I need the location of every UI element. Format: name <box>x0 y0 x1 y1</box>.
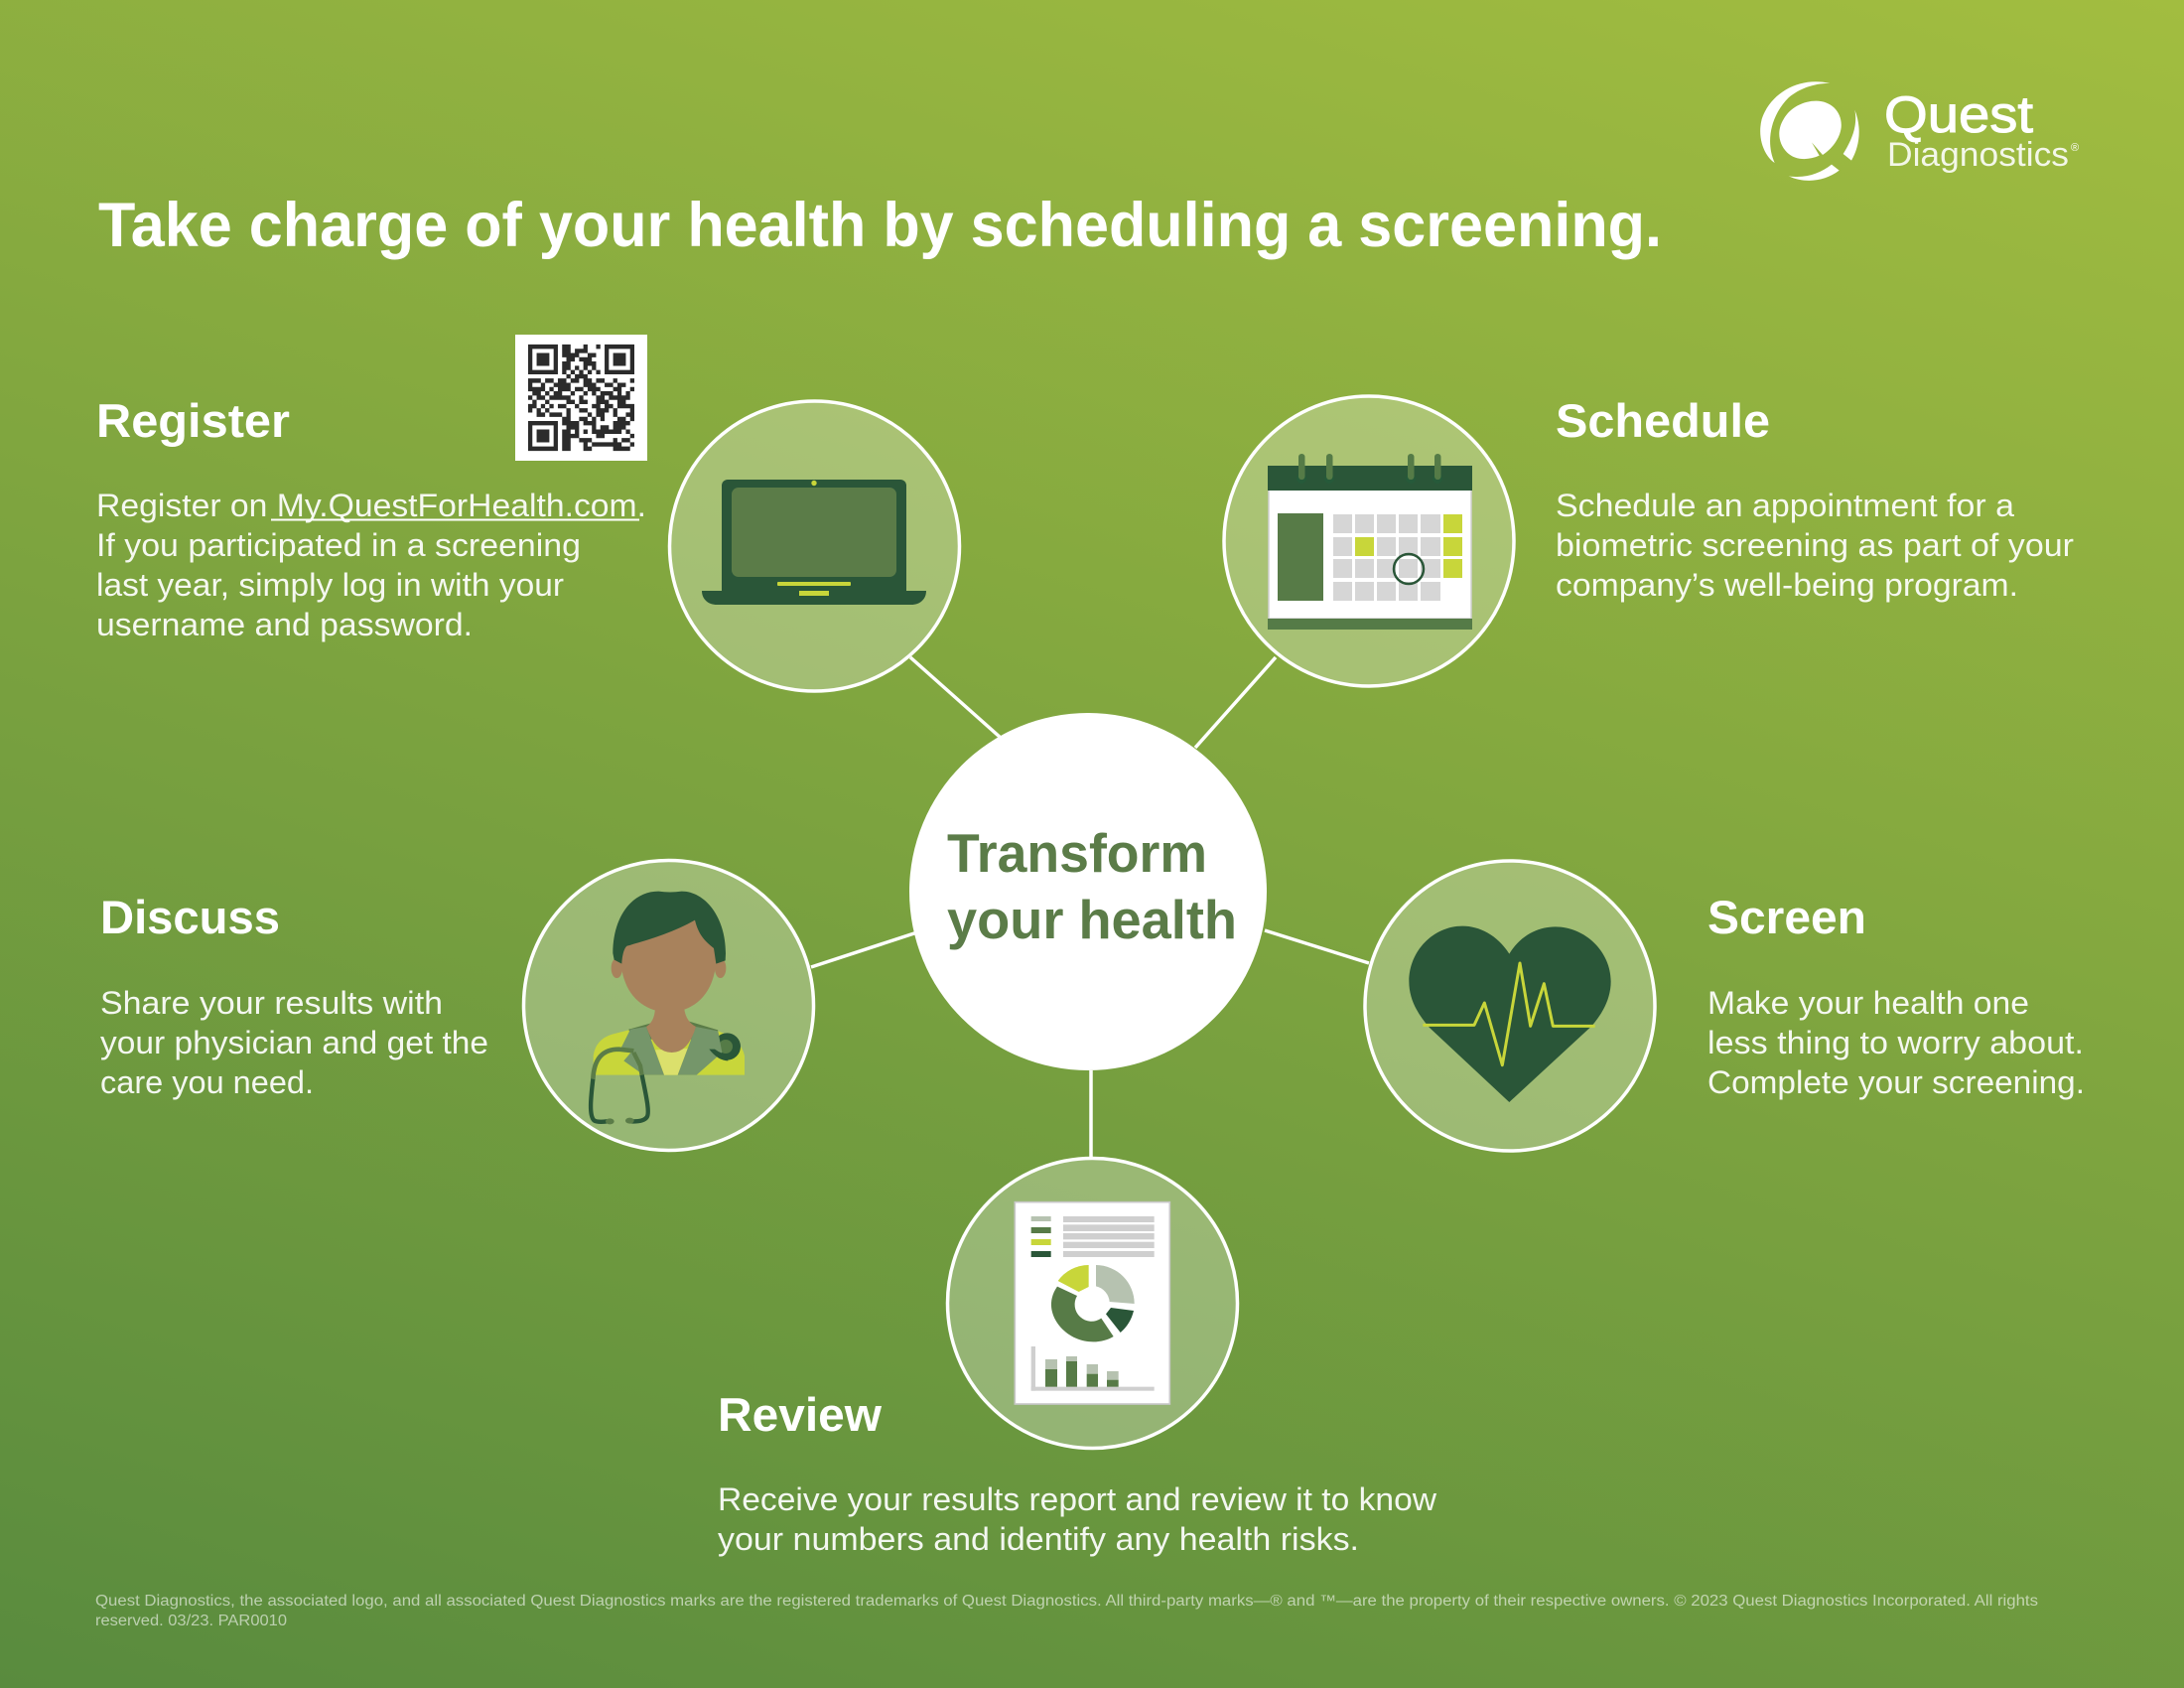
connector lines <box>811 657 1369 1157</box>
text block: Schedule description: company’s well-being program. <box>1556 567 2018 603</box>
circle: calendar <box>1224 396 1514 686</box>
text block: Schedule description <box>1556 488 2074 603</box>
panel: Register <box>96 394 646 642</box>
panel: Discuss <box>100 891 488 1100</box>
footer legal text: Quest Diagnostics, the associated logo, and all associated Quest Diagnostics marks are the registered trademarks of Quest Diagnostics. All third-party marks—® and ™—are the property of their respective owners. © 2023 Quest Diagnostics Incorporated. All rights <box>95 1593 2038 1610</box>
text block: Schedule description: biometric screening as part of your <box>1556 527 2074 563</box>
panel: Review <box>718 1388 1437 1557</box>
text block: Screen description: less thing to worry about. <box>1707 1025 2084 1060</box>
icon: Quest Q mark <box>1760 81 1859 181</box>
heading: Discuss: Discuss <box>100 891 280 943</box>
text block: Register description: username and password. <box>96 607 473 642</box>
footer legal text: reserved. 03/23. PAR0010 <box>95 1613 287 1629</box>
circle: doctor <box>524 860 814 1150</box>
text block: Review description <box>718 1481 1437 1557</box>
text block: Register description: last year, simply log in with your <box>96 567 564 603</box>
panel: Schedule <box>1556 394 2074 603</box>
text block: Screen description <box>1707 985 2085 1100</box>
text block: Discuss description <box>100 985 488 1100</box>
text block: Register description: Register on My.QuestForHealth.com. <box>96 488 646 523</box>
logo wordmark: Diagnostics <box>1887 136 2069 174</box>
heading: Schedule: Schedule <box>1556 394 1770 447</box>
icon: results report <box>1015 1202 1169 1404</box>
heading: Review: Review <box>718 1388 882 1441</box>
text block: Schedule description: Schedule an appointment for a <box>1556 488 2014 523</box>
panel: Screen <box>1707 891 2085 1100</box>
logo wordmark: ® <box>2071 142 2079 154</box>
logo: Quest Diagnostics <box>1760 81 2079 181</box>
icon: heart with pulse line <box>1409 926 1611 1102</box>
center circle: Transform your health: Transform <box>947 823 1207 884</box>
logo wordmark: Quest <box>1884 86 2034 144</box>
logo wordmark <box>1884 86 2079 174</box>
icon: laptop <box>702 480 926 605</box>
circle: report <box>947 1158 1237 1448</box>
center circle: Transform your health <box>909 713 1267 1070</box>
icon: doctor with stethoscope <box>591 892 745 1124</box>
footer legal text <box>95 1593 2038 1629</box>
text block: Review description: Receive your results report and review it to know <box>718 1481 1437 1517</box>
text block: Review description: your numbers and identify any health risks. <box>718 1521 1359 1557</box>
text block: Screen description: Make your health one <box>1707 985 2029 1021</box>
heading: Screen: Screen <box>1707 891 1866 943</box>
heading: Register: Register <box>96 394 290 447</box>
text block: Discuss description: care you need. <box>100 1064 314 1100</box>
QR code <box>515 335 647 461</box>
title: Take charge of your health by scheduling a screening. <box>98 191 1662 260</box>
text block: Discuss description: Share your results with <box>100 985 443 1021</box>
text block: Register description <box>96 488 646 642</box>
icon: calendar <box>1268 454 1472 630</box>
text block: Discuss description: your physician and get the <box>100 1025 488 1060</box>
center circle: Transform your health: your health <box>947 890 1237 950</box>
text block: Screen description: Complete your screening. <box>1707 1064 2085 1100</box>
text block: Register description: If you participated in a screening <box>96 527 581 563</box>
circle: heart <box>1365 861 1655 1151</box>
circle: laptop <box>669 401 959 691</box>
